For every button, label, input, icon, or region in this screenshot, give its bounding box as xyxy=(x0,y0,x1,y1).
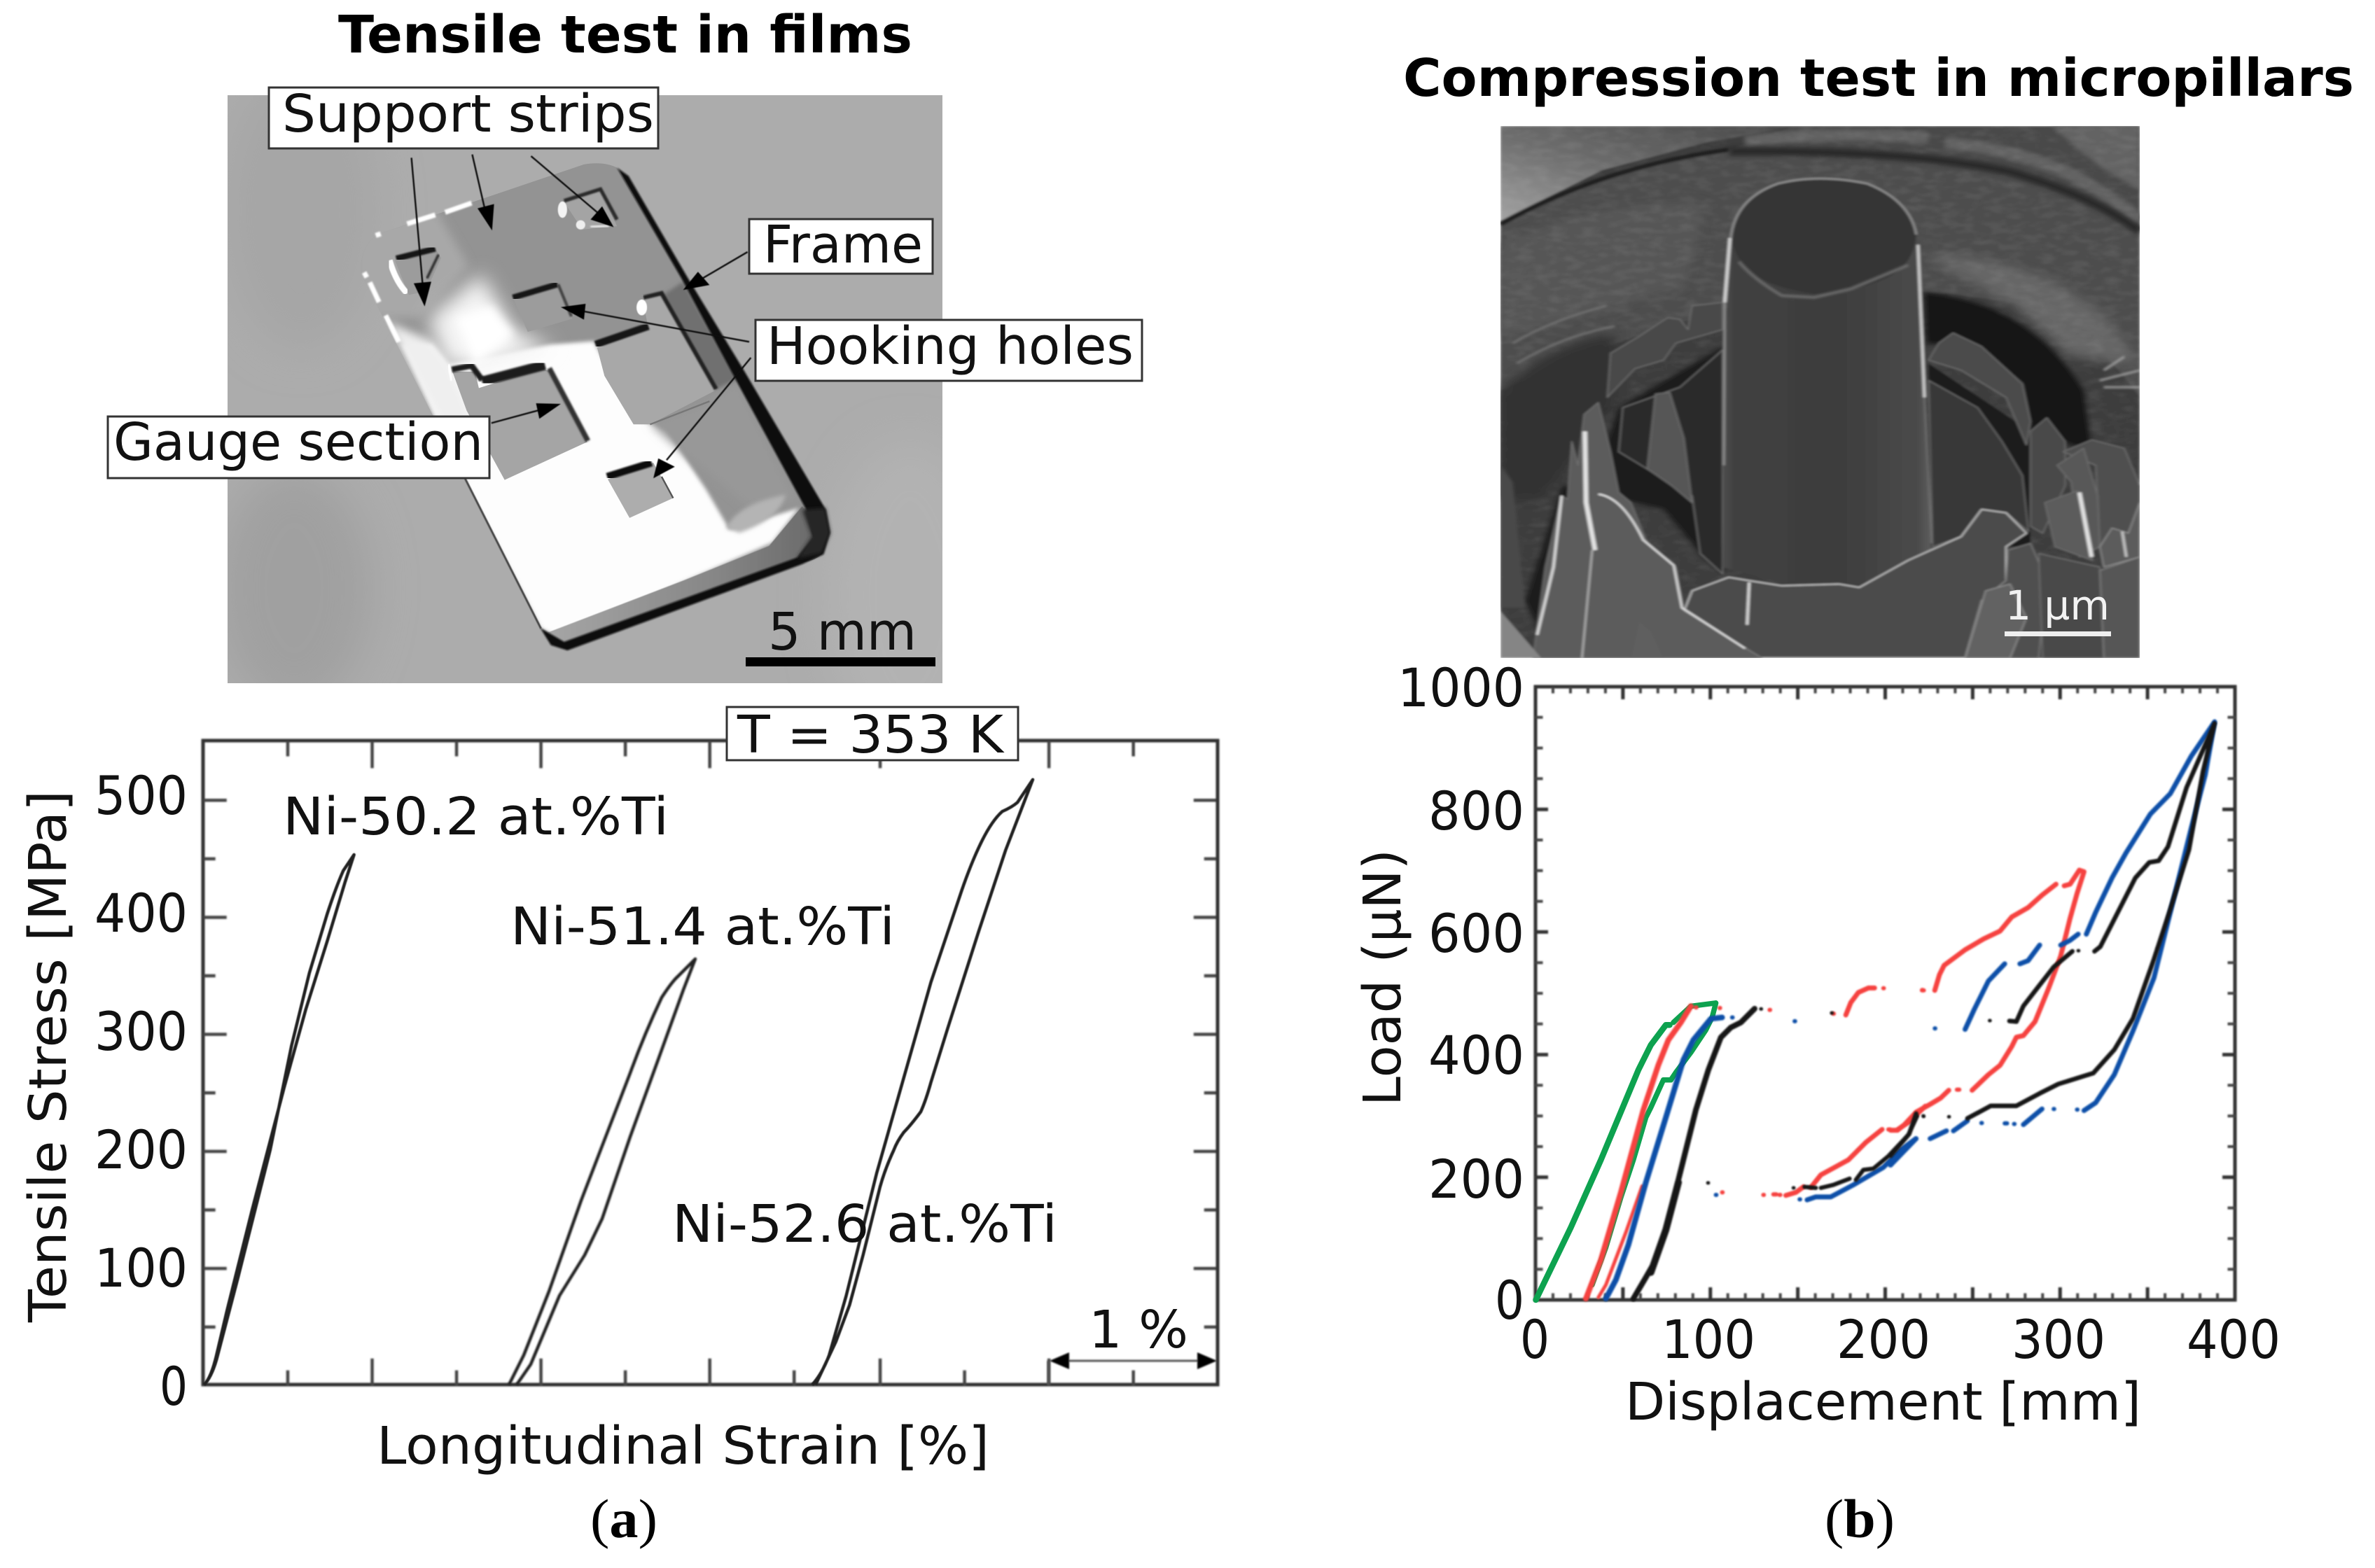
curves: black series xyxy=(1634,723,2215,1298)
y-axis tick labels: 800 xyxy=(1428,780,1524,842)
y-axis tick labels: 200 xyxy=(1428,1148,1524,1210)
label: hooking holes: Hooking holes xyxy=(767,316,1134,377)
x-axis title: Displacement [mm] xyxy=(1625,1372,2141,1432)
hooking hole: top left xyxy=(389,248,441,295)
y-axis tick labels: 400 xyxy=(1428,1024,1524,1086)
heading: tensile test in films: Tensile test in films xyxy=(338,5,912,65)
label: frame: Frame xyxy=(763,215,923,275)
rubble in front of pillar xyxy=(1500,402,2140,658)
y-axis title: Tensile Stress [MPa] xyxy=(18,790,78,1323)
scale bar: 5 mm: 5 mm xyxy=(768,602,917,662)
label: temperature: T = 353 K xyxy=(737,705,1005,765)
curves: green series xyxy=(1536,1003,1716,1300)
pit shadow xyxy=(1500,293,2091,635)
x-axis title: Longitudinal Strain [%] xyxy=(377,1416,989,1476)
hooking hole: middle xyxy=(513,284,572,332)
caption: (b): (b) xyxy=(1825,1488,1895,1549)
y-axis tick labels: 0 xyxy=(1495,1269,1524,1331)
y-axis tick labels: 1000 xyxy=(1398,657,1524,719)
label: 1 percent: 1 % xyxy=(1089,1300,1188,1360)
window: right of gauge section xyxy=(596,293,716,424)
arrows: specimen callouts xyxy=(412,155,751,478)
y-axis tick labels xyxy=(95,764,188,1418)
y-axis tick labels: 0 xyxy=(160,1355,188,1418)
pillar xyxy=(1722,178,1932,584)
curve: Ni-50.2 at.%Ti xyxy=(204,855,354,1385)
x-axis tick labels: 300 xyxy=(2012,1308,2105,1371)
specimen plate xyxy=(361,163,833,652)
y-axis tick labels: 400 xyxy=(95,882,188,944)
panel: tensile test in films (a) xyxy=(18,5,1218,1549)
y-axis tick labels: 500 xyxy=(95,764,188,827)
chart: tensile stress vs longitudinal strain xyxy=(18,705,1218,1476)
plot frame and ticks xyxy=(203,741,1218,1385)
x-axis tick labels: 400 xyxy=(2187,1308,2280,1371)
photo: SEM micropillar xyxy=(1500,126,2140,658)
x-axis tick labels: 0 xyxy=(1520,1308,1549,1371)
label: gauge section: Gauge section xyxy=(113,412,483,472)
panel: compression test in micropillars (b) xyxy=(1353,48,2354,1549)
scale bar: 1 µm: 1 µm xyxy=(2005,582,2110,629)
caption: (a): (a) xyxy=(590,1488,657,1549)
hooking hole: bottom xyxy=(607,463,673,518)
x-axis tick labels: 200 xyxy=(1837,1308,1930,1371)
rubble behind pillar xyxy=(1608,302,2140,574)
chart: load vs displacement xyxy=(1353,657,2280,1432)
photo: tensile film specimen xyxy=(228,95,942,683)
y-axis tick labels: 200 xyxy=(95,1119,188,1181)
y-axis title: Load (µN) xyxy=(1353,849,1413,1106)
label: support strips: Support strips xyxy=(282,84,654,144)
rubble highlights xyxy=(1537,431,2126,658)
heading: compression test in micropillars: Compression test in micropillars xyxy=(1403,48,2354,108)
curves: blue series xyxy=(1606,722,2215,1298)
y-axis tick labels xyxy=(1398,657,1524,1331)
y-axis tick labels: 100 xyxy=(95,1237,188,1299)
curve: Ni-51.4 at.%Ti xyxy=(509,959,695,1385)
x-axis tick labels xyxy=(1520,1308,2280,1371)
y-axis tick labels: 300 xyxy=(95,1000,188,1063)
label: Ni-50.2: Ni-50.2 at.%Ti xyxy=(283,787,669,847)
curves: red series xyxy=(1586,870,2084,1298)
curve: Ni-52.6 at.%Ti xyxy=(812,780,1033,1385)
x-axis tick labels: 100 xyxy=(1662,1308,1755,1371)
plot frame and ticks xyxy=(1535,687,2235,1300)
window: left of gauge section xyxy=(448,364,588,480)
arrow: 1 % span xyxy=(1048,1352,1217,1385)
hooking hole: top right xyxy=(558,189,617,230)
label: Ni-52.6: Ni-52.6 at.%Ti xyxy=(672,1194,1057,1254)
label: Ni-51.4: Ni-51.4 at.%Ti xyxy=(510,897,895,957)
y-axis tick labels: 600 xyxy=(1428,902,1524,965)
